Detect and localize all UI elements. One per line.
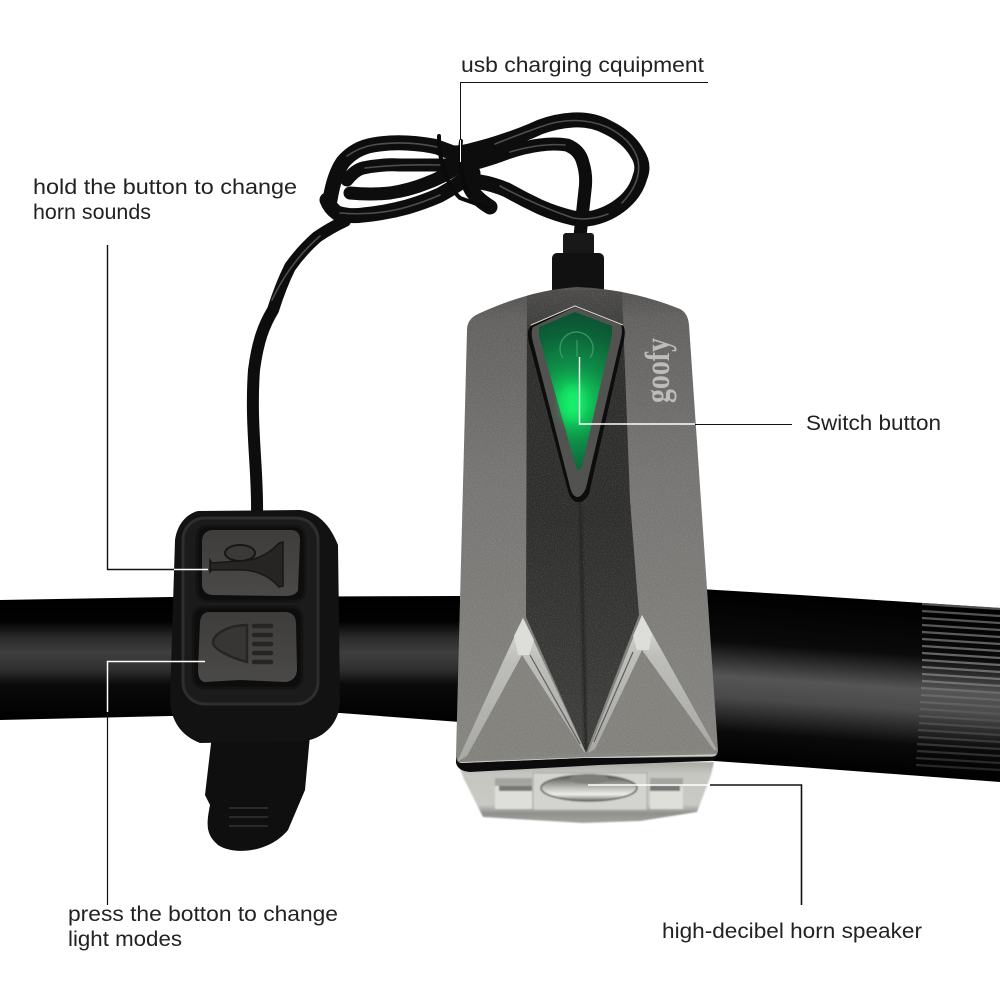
callout: horn sounds: horn sounds [33,201,151,224]
metal grain [456,280,720,770]
knurled grip [916,604,1000,770]
callout: horn sounds [33,176,297,570]
callout: light modes [68,662,338,951]
zip ties [439,136,488,208]
cable loop [253,120,642,514]
callout: switch button: Switch button [806,412,941,435]
left peak [457,618,586,762]
callout: usb charging: usb charging cquipment [461,54,704,77]
controller body [170,510,340,743]
callout: usb charging [460,54,708,162]
callout: light modes: light modes [68,928,182,951]
USB plug [552,233,604,298]
horn button [202,530,300,596]
housing shell [456,280,720,770]
light button [198,612,297,682]
remote controller [170,510,340,851]
logo: goofy [638,338,677,403]
dark centre panel [526,290,639,753]
handlebar [0,589,1000,782]
strap [205,735,310,851]
right peak [588,615,717,753]
horn icon [210,542,283,587]
callout: light modes: press the botton to change [68,903,338,926]
power button [528,306,625,502]
callout: switch button [580,357,941,435]
lens housing [458,762,714,823]
headlight icon [213,625,271,662]
callout: horn sounds: hold the button to change [33,176,297,199]
reflector [541,775,637,801]
bike light [456,280,720,823]
power icon [560,332,593,358]
callout: horn speaker: high-decibel horn speaker [662,920,922,943]
housing base [456,750,718,772]
callout: horn speaker [588,785,922,943]
